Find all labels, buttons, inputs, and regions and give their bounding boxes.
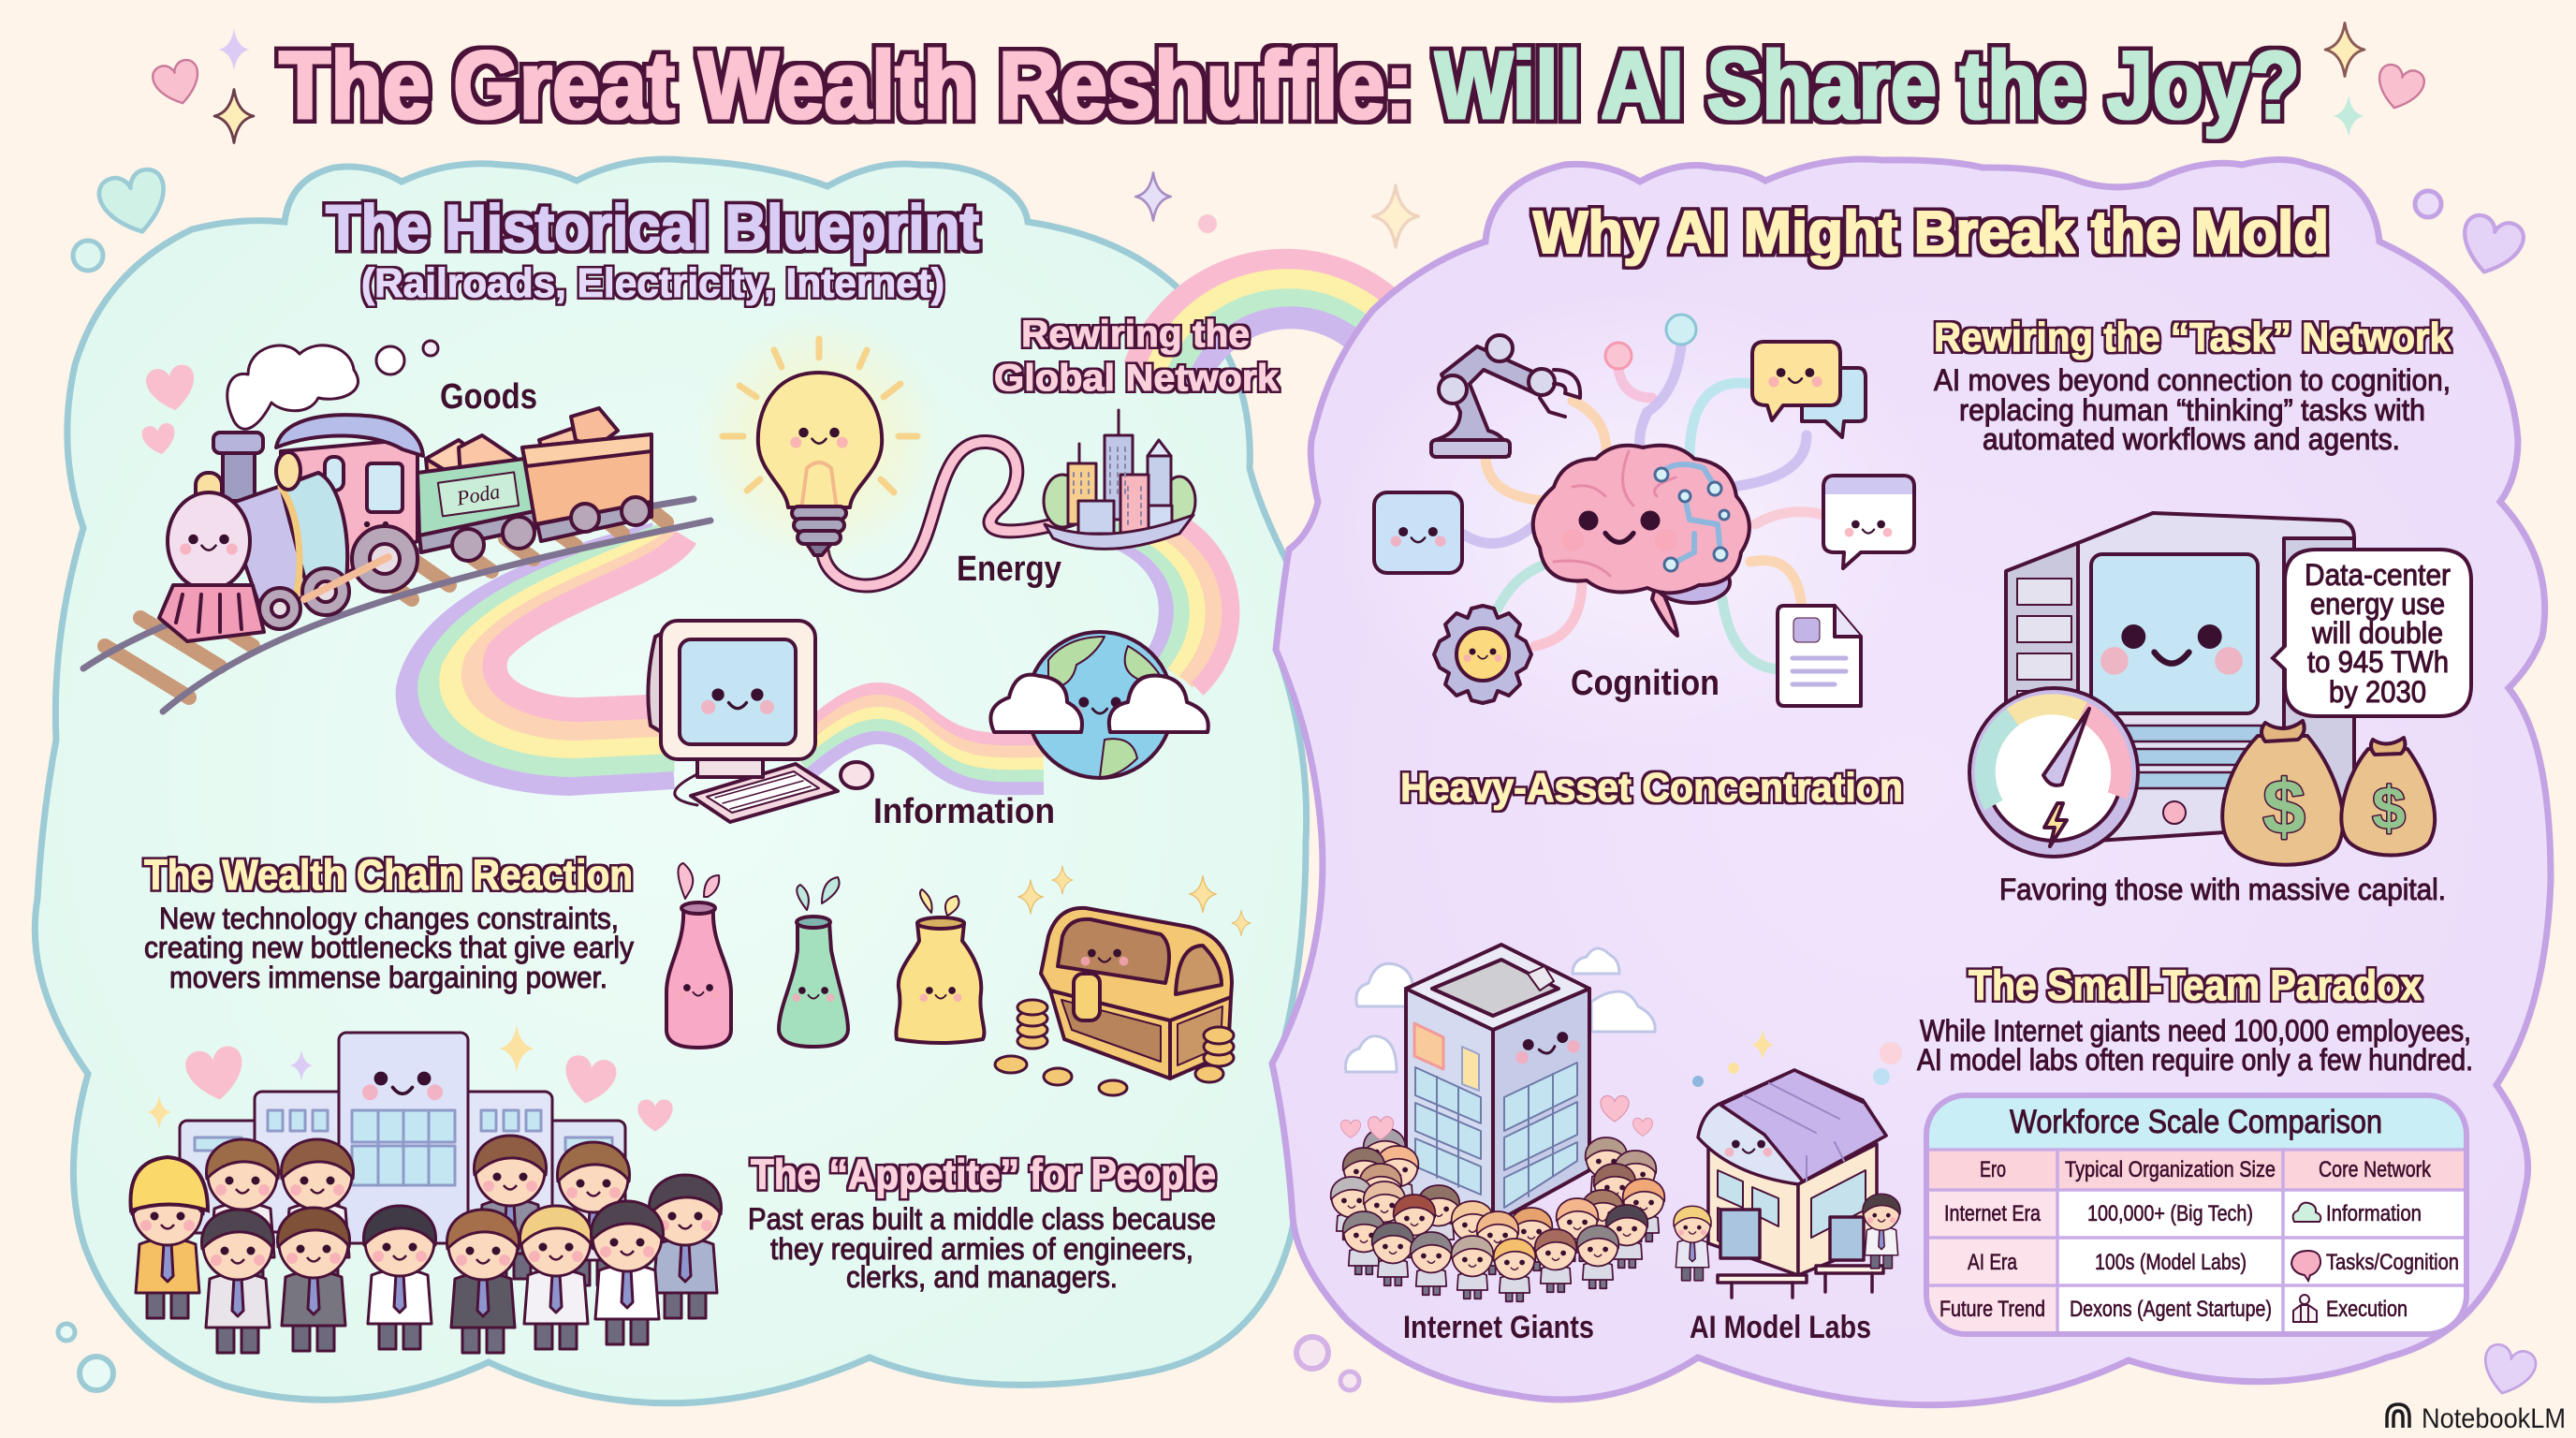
icon: green bottle: [779, 877, 848, 1047]
icon: network nodes: [1605, 315, 1696, 369]
text: small-team body: AI model labs often require only a few hundred.: [1917, 1043, 2473, 1077]
icon: speech bubble callout: to 945 TWh: [2307, 645, 2449, 679]
text: wealth chain reaction body: movers immense bargaining power.: [169, 961, 607, 994]
icon: internet giant tower: [1406, 945, 1589, 1224]
table: workforce scale comparison: Typical Organization Size: [2065, 1157, 2276, 1182]
icon: robot arm: [1431, 335, 1580, 457]
brain connectors: [1462, 346, 1823, 669]
icon: pink power cable: [823, 442, 1072, 585]
heading: the wealth chain reaction: The Wealth Chain Reaction: [144, 851, 633, 899]
panel: why AI might break the mold: [1272, 159, 2551, 1405]
icon: browser bubble: [1823, 476, 1914, 568]
icon: gear: [1434, 606, 1531, 703]
icon: document: [1778, 606, 1861, 706]
table: workforce scale comparison: Workforce Scale Comparison: [2010, 1104, 2382, 1140]
icon: chat bubbles: [1752, 342, 1866, 437]
label: AI model labs: AI Model Labs: [1690, 1310, 1871, 1345]
table: workforce scale comparison: Execution: [2326, 1297, 2408, 1322]
heading: heavy-asset concentration: Heavy-Asset Concentration: [1400, 765, 1903, 811]
panel: historical blueprint: [35, 159, 1307, 1403]
icon: speech bubble callout: energy use: [2310, 587, 2445, 621]
table: workforce scale comparison: [1926, 1095, 2466, 1334]
text: task network body: automated workflows and agents.: [1983, 422, 2400, 456]
label: rewiring the global network: Rewiring the: [1021, 314, 1250, 355]
icon: retro computer: [648, 621, 872, 822]
icon: table brain: [2291, 1251, 2320, 1281]
icon: speech bubble callout: by 2030: [2329, 675, 2426, 709]
text: appetite body: [748, 1202, 1216, 1294]
table: workforce scale comparison: 100s (Model Labs): [2095, 1250, 2247, 1275]
table: workforce scale comparison: Dexons (Agent Startupe): [2070, 1297, 2272, 1322]
icon: light bulb: [693, 314, 945, 566]
label: cognition: Cognition: [1571, 664, 1720, 703]
icon: lab sparkles: [1692, 1030, 1902, 1087]
label: rewiring the global network: [994, 314, 1280, 399]
icon: steam train: Poda: [454, 479, 502, 510]
table: workforce scale comparison: Future Trend: [1939, 1297, 2045, 1322]
heading: rewiring the task network: Rewiring the “Task” Network: [1934, 315, 2451, 360]
icon: yellow bottle: [896, 889, 984, 1043]
label: goods: Goods: [440, 377, 537, 417]
text: wealth chain reaction body: [144, 902, 634, 994]
label: information: Information: [873, 792, 1055, 831]
icon: table cloud: [2293, 1203, 2320, 1222]
label: internet giants: Internet Giants: [1403, 1310, 1594, 1345]
text: small-team body: While Internet giants need 100,000 employees,: [1920, 1014, 2471, 1048]
text: task network body: replacing human “thinking” tasks with: [1959, 393, 2425, 427]
rainbow arch between panels: [1134, 260, 1404, 387]
icon: speech bubble callout: [2273, 550, 2471, 716]
icon: small money bag: $: [2372, 774, 2406, 842]
icon: large money bag: $: [2262, 765, 2305, 850]
icon: speech bubble callout: Data-center: [2305, 558, 2451, 592]
table: workforce scale comparison: Internet Era: [1944, 1201, 2042, 1226]
icon: city: [1044, 410, 1195, 549]
heading: the historical blueprint: The Historical Blueprint: [326, 192, 979, 263]
icon: energy gauge: [1969, 688, 2138, 857]
icon: blue cube: [1374, 492, 1462, 573]
title: The Great Wealth Reshuffle:: [279, 32, 1413, 139]
title: [279, 32, 2300, 139]
glow behind brain: [1329, 290, 1947, 758]
icon: office buildings: [147, 1024, 673, 1243]
icon: data-center server: [2006, 513, 2354, 841]
text: appetite body: Past eras built a middle class because: [748, 1202, 1216, 1236]
icon: treasure chest: [995, 866, 1251, 1095]
text: appetite body: they required armies of engineers,: [770, 1232, 1193, 1266]
icon: AI model lab house: [1674, 1070, 1900, 1298]
illustration: group of workers: [130, 1136, 721, 1353]
text: wealth chain reaction body: New technology changes constraints,: [159, 902, 619, 935]
icon: steam train: [83, 341, 710, 712]
icon: globe with clouds: [990, 632, 1208, 778]
table: workforce scale comparison: AI Era: [1968, 1250, 2018, 1275]
heading: the historical blueprint: [326, 192, 979, 306]
icon: table execution: [2293, 1295, 2317, 1322]
icon: small money bag: [2341, 738, 2435, 856]
text: wealth chain reaction body: creating new bottlenecks that give early: [144, 931, 634, 964]
icon: pink bottle: [666, 863, 731, 1048]
icon: hearts around crowd: [1340, 1095, 1653, 1140]
heading: the appetite for people: The “Appetite” for People: [751, 1151, 1216, 1198]
title: Will AI Share the Joy?: [1435, 32, 2300, 139]
label: rewiring the global network: Global Network: [994, 358, 1280, 399]
rainbow network ribbon: [408, 521, 1231, 788]
icon: clouds by tower: [1346, 948, 1655, 1072]
table: workforce scale comparison: 100,000+ (Big Tech): [2087, 1201, 2253, 1226]
text: small-team body: [1917, 1014, 2473, 1077]
icon: crowd of employees: [1331, 1128, 1664, 1301]
text: task network body: [1934, 363, 2451, 456]
text: task network body: AI moves beyond connection to cognition,: [1934, 363, 2451, 397]
table: workforce scale comparison: Information: [2326, 1201, 2422, 1226]
heading: the historical blueprint: (Railroads, Electricity, Internet): [361, 260, 944, 306]
heading: the small-team paradox: The Small-Team Paradox: [1969, 961, 2422, 1009]
table: workforce scale comparison: Tasks/Cognition: [2326, 1250, 2459, 1275]
icon: hearts by train: [140, 363, 199, 457]
text: favoring capital: Favoring those with massive capital.: [1999, 873, 2446, 906]
text: appetite body: clerks, and managers.: [846, 1260, 1118, 1294]
icon: large money bag: [2222, 721, 2343, 865]
icon: speech bubble callout: will double: [2311, 616, 2443, 650]
icon: brain: [1533, 446, 1749, 636]
table: workforce scale comparison: Ero: [1980, 1157, 2006, 1182]
heading: why AI might break the mold: Why AI Might Break the Mold: [1533, 198, 2329, 266]
label: energy: Energy: [957, 550, 1061, 589]
table: workforce scale comparison: Core Network: [2319, 1157, 2432, 1182]
